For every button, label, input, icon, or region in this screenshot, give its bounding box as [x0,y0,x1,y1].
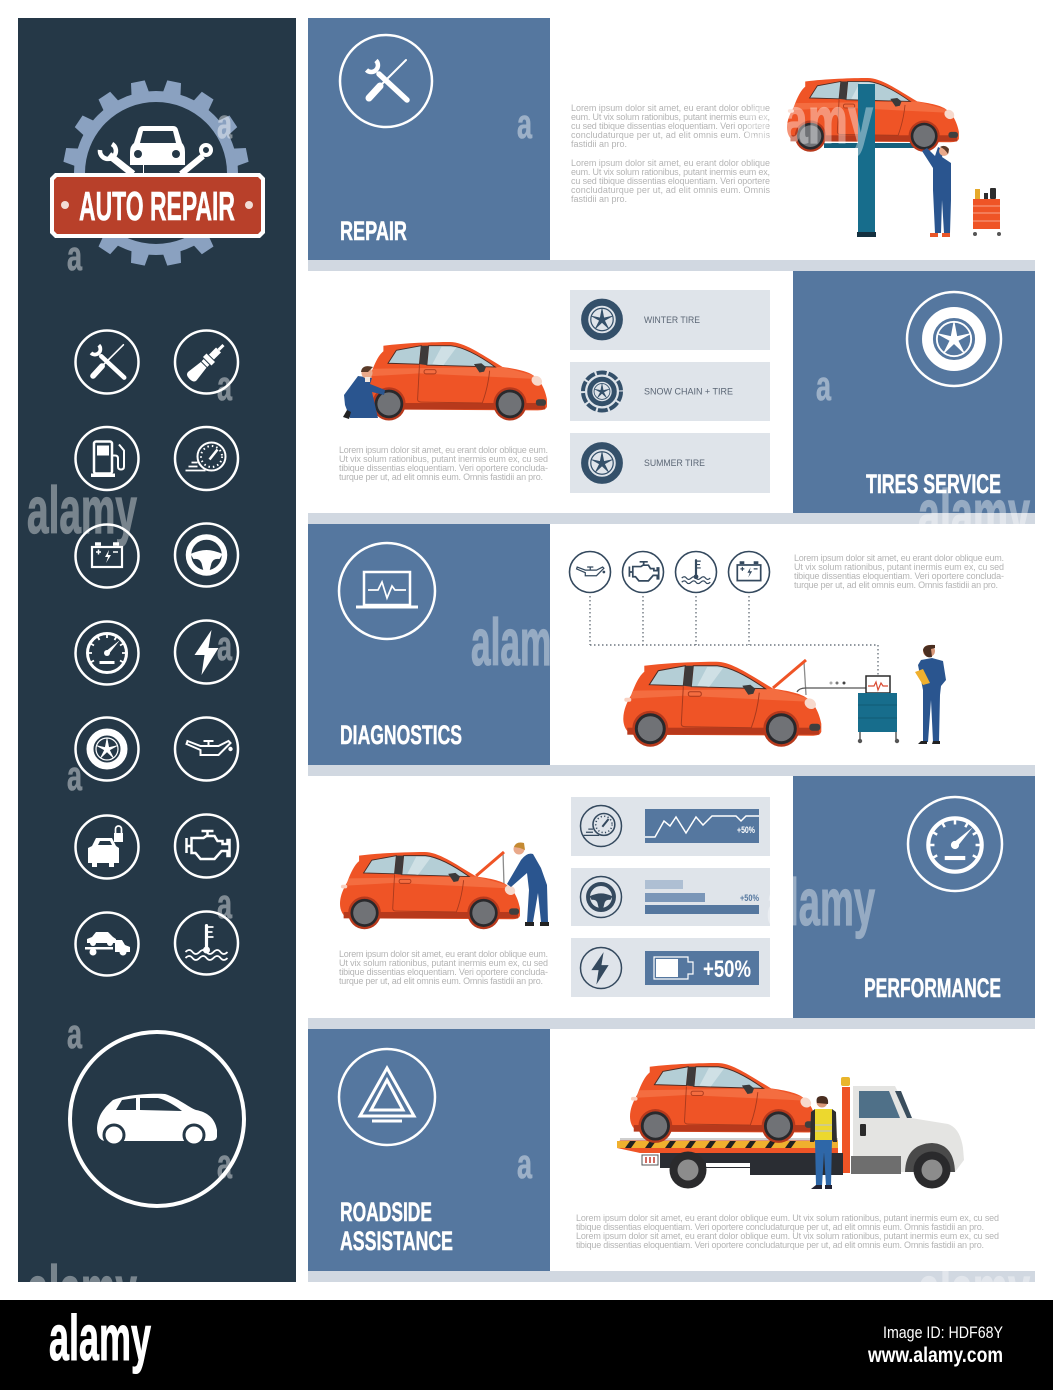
option: snow chain + tire: SNOW CHAIN + TIRE [644,386,733,398]
icon: battery warning [728,552,770,592]
text block: roadside: tibique dissentias eloquentiam. Veri oportere concludaturque per ut, ad elit omnis eum. Omnis fastidii an pro. [576,1240,984,1250]
flatbed with hazard stripes [617,1138,838,1153]
panel: tires service [308,271,1035,524]
text block: repair first paragraph: fastidii an pro. [571,139,627,149]
text block: diagnostics: tibique dissentias eloquentiam. Veri oportere concluda- [794,571,1004,581]
icon: steering wheel [175,524,238,586]
panel: sidebar [18,18,296,1282]
icon: large car circle [70,1032,244,1206]
icon: battery [76,524,138,588]
text block: repair first paragraph: cu sed tibique dissentias eloquentiam. Veri oportere [571,121,770,131]
watermarks: a [517,1140,532,1187]
icon: wheel [76,718,138,780]
icon: car lock [76,816,138,878]
text block: repair second paragraph: Lorem ipsum dolor sit amet, eu erant dolor oblique [571,158,770,168]
option: winter tire: WINTER TIRE [644,315,700,326]
icon: oil warning [570,552,610,592]
text block: diagnostics: Lorem ipsum dolor sit amet, eu erant dolor oblique eum. [794,553,1004,563]
text block: tires [339,445,548,482]
option: winter tire [570,290,770,350]
text block: performance [339,949,548,986]
text block: performance: turque per ut, ad elit omnis eum. Omnis fastidii an pro. [339,976,543,986]
text block: tires: Lorem ipsum dolor sit amet, eu erant dolor oblique eum. [339,445,548,455]
text block: repair first paragraph: Lorem ipsum dolor sit amet, eu erant dolor oblique [571,103,770,113]
icon: oil can [175,718,238,780]
cart with bottles [973,188,1001,236]
watermarks: alamy [27,1252,137,1326]
icon: fuel pump [76,427,138,490]
illustration: car on lift with mechanic [787,78,1001,237]
icon: fast speedometer [175,427,238,490]
icon: tools [76,330,138,394]
metric: speed line chart: +50% [737,825,755,835]
heading: diagnostics: DIAGNOSTICS [340,720,462,750]
icon: engine [175,814,238,878]
watermarks: alamy [27,473,137,547]
footer image id: Image ID: HDF68Y [883,1323,1003,1342]
icon: coolant temperature [175,912,238,974]
watermarks: a [217,100,232,147]
watermarks: a [217,622,232,669]
watermarks: alamy [767,865,875,939]
footer bar [0,1300,1053,1390]
text block: performance: tibique dissentias eloquentiam. Veri oportere concluda- [339,967,548,977]
icon: warning triangle [339,1049,435,1145]
text block: performance: Ut vix solum rationibus, putant inermis eum ex, cu sed [339,958,548,968]
watermarks: a [67,752,82,799]
watermarks: a [217,362,232,409]
metric: steering bar chart [571,868,770,926]
icon: spark plug [175,330,238,394]
dotted connectors [590,596,878,675]
text block: roadside: tibique dissentias eloquentiam. Veri oportere concludaturque per ut, ad elit omnis eum. Omnis fastidii an pro. [576,1222,984,1232]
metric: steering bar chart: +50% [740,893,759,903]
logo title: AUTO REPAIR [79,183,235,229]
panel: repair [308,18,1035,271]
panel: diagnostics [308,524,1035,776]
text block: tires: tibique dissentias eloquentiam. Veri oportere concluda- [339,463,548,473]
icon: repair tools [340,35,432,127]
text block: performance: Lorem ipsum dolor sit amet, eu erant dolor oblique eum. [339,949,548,959]
illustration: tow truck with car [617,1063,964,1189]
icon: gauge [76,622,138,684]
text block: repair second paragraph: eum. Ut vix solum rationibus, putant inermis eum ex, [571,167,770,177]
icon: laptop diagnostics [339,543,435,639]
option: summer tire: SUMMER TIRE [644,458,705,469]
text block: diagnostics: turque per ut, ad elit omnis eum. Omnis fastidii an pro. [794,580,998,590]
text block: repair first paragraph [571,103,770,149]
illustration: car with diagnostic cart [623,645,946,747]
metric: battery charge: +50% [703,956,751,983]
footer url: www.alamy.com [867,1344,1003,1367]
watermarks: a [217,880,232,927]
heading: repair: REPAIR [340,216,407,246]
option: snow chain + tire [570,362,770,421]
heading: assistance: ASSISTANCE [340,1226,453,1256]
icon: tire [907,292,1001,386]
text block: repair second paragraph: cu sed tibique dissentias eloquentiam. Veri oportere [571,176,770,186]
watermarks: a [67,232,82,279]
text block: roadside [576,1213,999,1250]
panel: roadside assistance [308,1029,1035,1282]
text block: roadside: Lorem ipsum dolor sit amet, eu erant dolor oblique eum. Ut vix solum rationibus, putant inermis eum ex, cu sed [576,1213,999,1223]
metric: battery charge [571,938,770,997]
watermarks: a [816,362,831,409]
watermarks: a [517,100,532,147]
worker in safety vest [810,1096,837,1189]
icon: gauge [908,797,1002,891]
text block: repair first paragraph: concludaturque per ut, ad elit omnis eum. Omnis [571,130,770,140]
text block: roadside: Lorem ipsum dolor sit amet, eu erant dolor oblique eum. Ut vix solum rationibus, putant inermis eum ex, cu sed [576,1231,999,1241]
icon: lightning bolt [175,620,238,684]
illustration: car with mechanic under hood [340,842,549,929]
watermarks: alamy [471,605,571,679]
text block: diagnostics [794,553,1004,590]
watermarks: a [217,1140,232,1187]
text block: repair second paragraph: fastidii an pro. [571,194,627,204]
watermarks: a [67,1010,82,1057]
text block: tires: Ut vix solum rationibus, putant inermis eum ex, cu sed [339,454,548,464]
footer logo: alamy [49,1302,151,1374]
heading: roadside: ROADSIDE [340,1197,432,1227]
logo: auto repair badge [50,80,265,266]
icon: temperature warning [676,552,716,592]
icon: engine warning [622,552,664,592]
panel: performance [308,776,1035,1029]
illustration: car with kneeling mechanic [343,342,547,421]
text block: repair first paragraph: eum. Ut vix solum rationibus, putant inermis eum ex, [571,112,770,122]
text block: repair second paragraph [571,158,770,204]
icon: tow truck [76,912,138,976]
text block: diagnostics: Ut vix solum rationibus, putant inermis eum ex, cu sed [794,562,1004,572]
text block: tires: turque per ut, ad elit omnis eum. Omnis fastidii an pro. [339,472,543,482]
watermarks: alamy [745,83,873,157]
text block: repair second paragraph: concludaturque per ut, ad elit omnis eum. Omnis [571,185,770,195]
option: summer tire [570,433,770,493]
metric: speed line chart [571,797,770,856]
